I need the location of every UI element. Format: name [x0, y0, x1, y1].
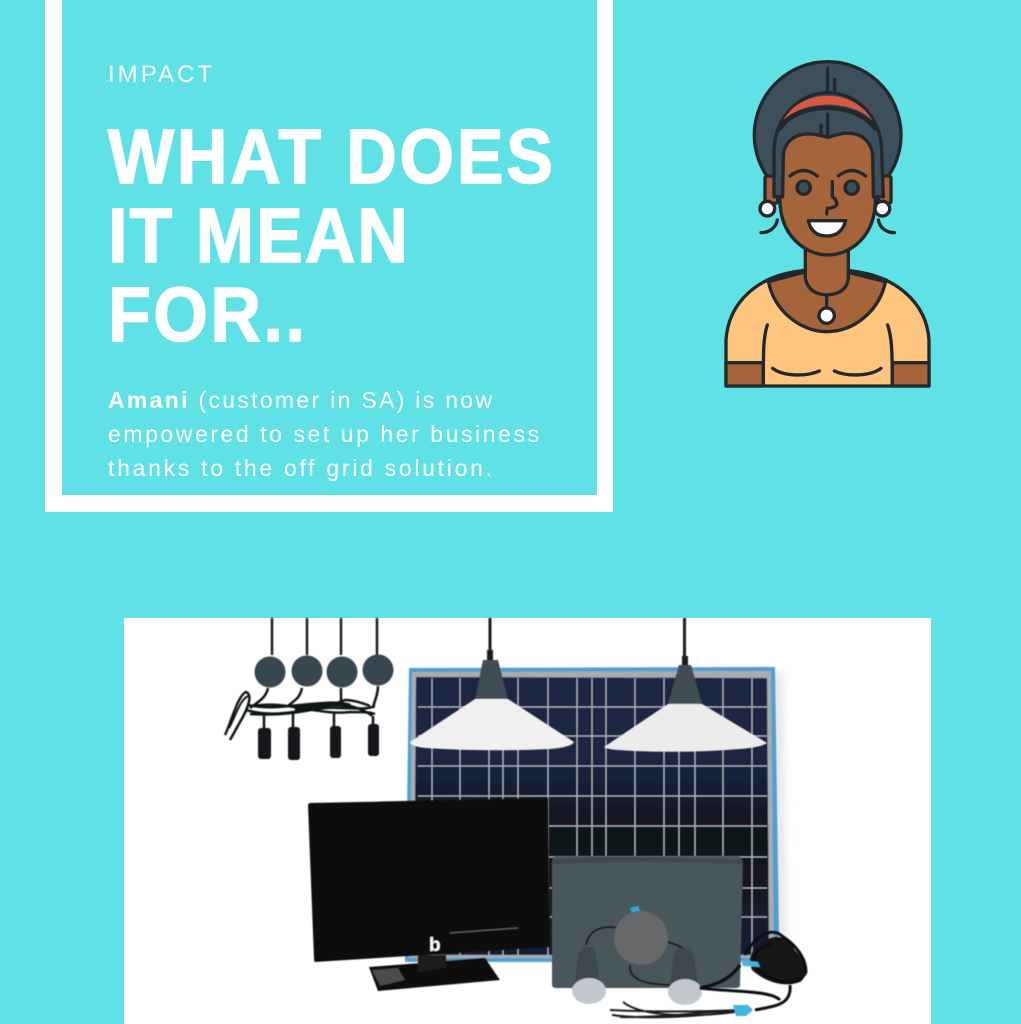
character face	[780, 133, 875, 255]
pendant lamp right	[604, 618, 767, 752]
icon: Amani character illustration	[726, 62, 929, 386]
monitor screen	[308, 798, 550, 962]
character outer hair	[754, 62, 901, 177]
body text: Amani description: empowered to set up her business	[108, 421, 539, 447]
body text: Amani description: Amani (customer in SA) is now	[108, 387, 492, 413]
character ears and earrings	[760, 176, 894, 233]
character inner hair and headband	[774, 93, 883, 197]
hanging lights set	[225, 618, 394, 760]
panel: product photo	[124, 618, 931, 1024]
small lamp left	[572, 947, 606, 1004]
monitor base	[369, 958, 500, 991]
box cable	[586, 927, 685, 985]
battery box	[552, 856, 743, 1005]
tangled cables	[225, 686, 378, 740]
heading: what does it mean for: FOR..	[108, 271, 305, 358]
grey circle	[614, 911, 668, 965]
inline switches	[258, 724, 379, 760]
body text: Amani description	[108, 387, 539, 481]
heading: what does it mean for	[108, 113, 553, 358]
pendant lamp left	[410, 618, 574, 750]
heading: what does it mean for: IT MEAN	[108, 192, 408, 279]
small lamp right	[668, 948, 702, 1005]
coiled cables and connectors	[610, 932, 806, 1017]
eyebrow: IMPACT: IMPACT	[108, 61, 212, 88]
blue indicator	[630, 906, 640, 913]
panel: impact text frame	[45, 0, 613, 512]
character neck and necklace	[805, 250, 848, 295]
character body	[726, 271, 929, 386]
heading: what does it mean for: WHAT DOES	[108, 113, 553, 200]
monitor	[308, 798, 550, 991]
solar panel grid	[418, 678, 767, 955]
solar panel	[405, 667, 787, 962]
blue connectors	[741, 960, 760, 967]
monitor logo: b	[429, 935, 441, 956]
body text: Amani description: thanks to the off grid solution.	[108, 455, 492, 481]
